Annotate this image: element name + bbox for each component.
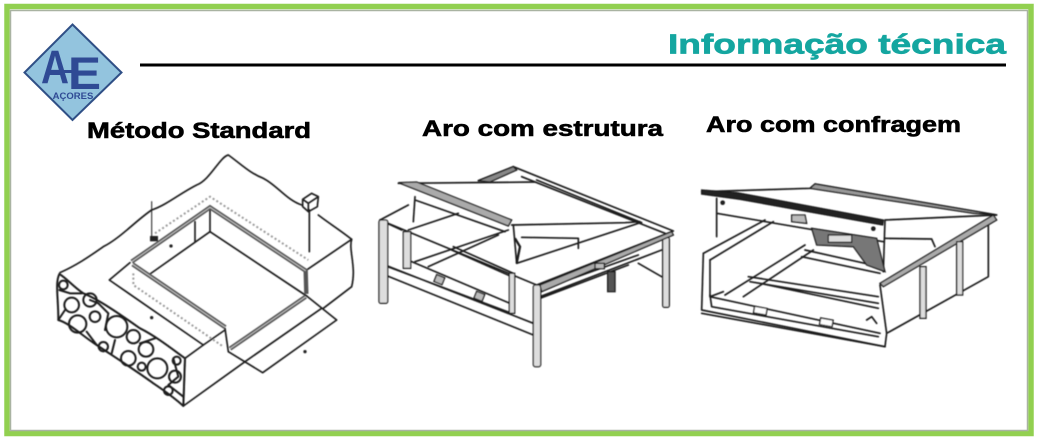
logo: A-E Açores diamond: AÇORES — [53, 91, 93, 102]
diagram: frame with structure (table leveler) — [379, 167, 673, 367]
logo: A-E Açores diamond — [24, 24, 122, 120]
logo: A-E Açores diamond: E — [68, 48, 101, 99]
diagram: frame with formwork — [702, 184, 997, 347]
diagram: standard method pit in concrete — [57, 155, 353, 406]
heading: Aro com estrutura: Aro com estrutura — [422, 116, 664, 141]
heading: Aro com confragem: Aro com confragem — [706, 112, 961, 137]
heading: Método Standard: Método Standard — [87, 118, 311, 143]
logo: A-E Açores diamond: A — [41, 40, 69, 94]
gray steel angle trim — [132, 207, 306, 349]
title: Informação técnica — [668, 28, 1007, 60]
title rule — [140, 64, 1006, 66]
